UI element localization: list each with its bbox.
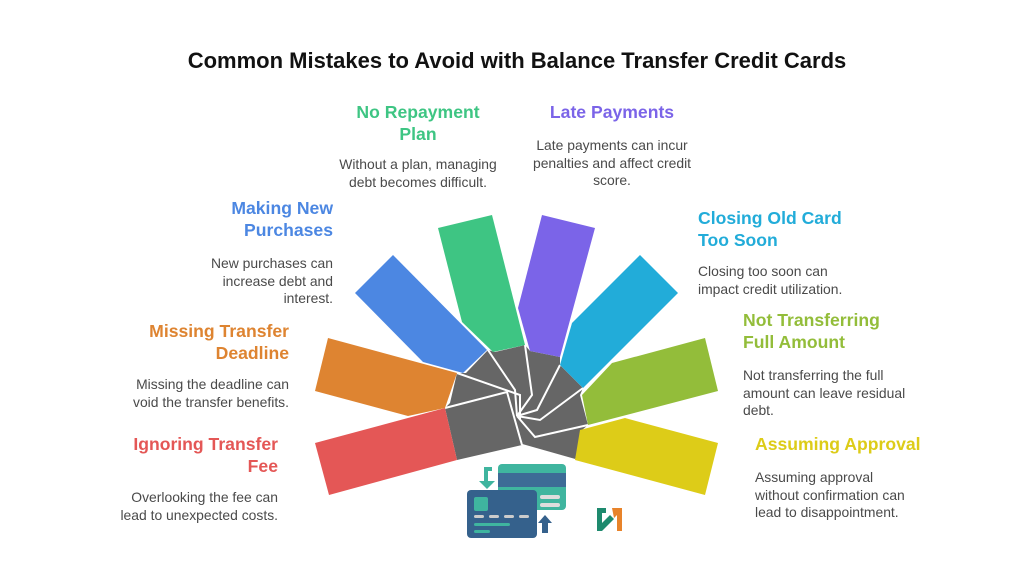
label: not transferring full amount: Full Amount — [743, 332, 845, 352]
title: Common Mistakes to Avoid with Balance Transfer Credit Cards — [188, 48, 846, 73]
hub — [445, 345, 588, 460]
segment: blue — [355, 255, 487, 373]
label: no repayment plan: Plan — [399, 124, 437, 144]
label: ignoring transfer fee: Fee — [248, 456, 278, 476]
label: making new purchases: increase debt and — [223, 272, 333, 288]
label: no repayment plan: debt becomes difficult. — [349, 174, 487, 190]
segment: cyan — [560, 255, 678, 388]
label: making new purchases: New purchases can — [211, 255, 333, 271]
label: not transferring full amount: Not transferring the full — [743, 367, 884, 383]
label: no repayment plan — [339, 102, 497, 190]
label: late payments: Late Payments — [550, 102, 674, 122]
label: making new purchases: interest. — [284, 290, 333, 306]
label: not transferring full amount — [743, 310, 905, 418]
label: closing old card: impact credit utilization. — [698, 280, 842, 296]
label: ignoring transfer fee: Ignoring Transfer — [133, 434, 278, 454]
label: ignoring transfer fee: Overlooking the fee can — [131, 489, 278, 505]
segment: yellow — [575, 418, 718, 495]
label: late payments: Late payments can incur — [536, 137, 688, 153]
label: assuming approval — [755, 434, 921, 520]
segment: lime — [582, 338, 718, 425]
label: making new purchases: Purchases — [244, 220, 333, 240]
label: closing old card: Closing too soon can — [698, 263, 828, 279]
label: missing transfer deadline: Missing the deadline can — [136, 376, 289, 392]
label: not transferring full amount: Not Transferring — [743, 310, 880, 330]
label: making new purchases — [211, 198, 334, 306]
label: assuming approval: Assuming Approval — [755, 434, 921, 454]
label: missing transfer deadline: void the transfer benefits. — [133, 394, 289, 410]
label: no repayment plan: No Repayment — [356, 102, 480, 122]
label: closing old card: Closing Old Card — [698, 208, 842, 228]
label: missing transfer deadline: Missing Transfer — [149, 321, 289, 341]
segment: orange — [315, 338, 457, 416]
label: closing old card: Too Soon — [698, 230, 778, 250]
label: assuming approval: Assuming approval — [755, 469, 873, 485]
label: no repayment plan: Without a plan, managing — [339, 156, 497, 172]
label: not transferring full amount: amount can leave residual — [743, 384, 905, 400]
label: closing old card — [698, 208, 842, 297]
label: ignoring transfer fee — [120, 434, 278, 523]
label: making new purchases: Making New — [231, 198, 333, 218]
label: late payments — [533, 102, 691, 188]
label: late payments: score. — [593, 172, 631, 188]
segment: purple — [518, 215, 595, 357]
segment: red — [315, 408, 457, 495]
label: assuming approval: lead to disappointment. — [755, 504, 899, 520]
label: late payments: penalties and affect credit — [533, 154, 691, 170]
icon: logo — [597, 508, 622, 531]
label: ignoring transfer fee: lead to unexpected costs. — [120, 506, 278, 522]
label: not transferring full amount: debt. — [743, 402, 774, 418]
label: missing transfer deadline — [133, 321, 289, 410]
segment: green — [438, 215, 525, 352]
label: assuming approval: without confirmation can — [755, 486, 905, 502]
icon: credit cards — [467, 464, 566, 538]
label: missing transfer deadline: Deadline — [216, 343, 289, 363]
